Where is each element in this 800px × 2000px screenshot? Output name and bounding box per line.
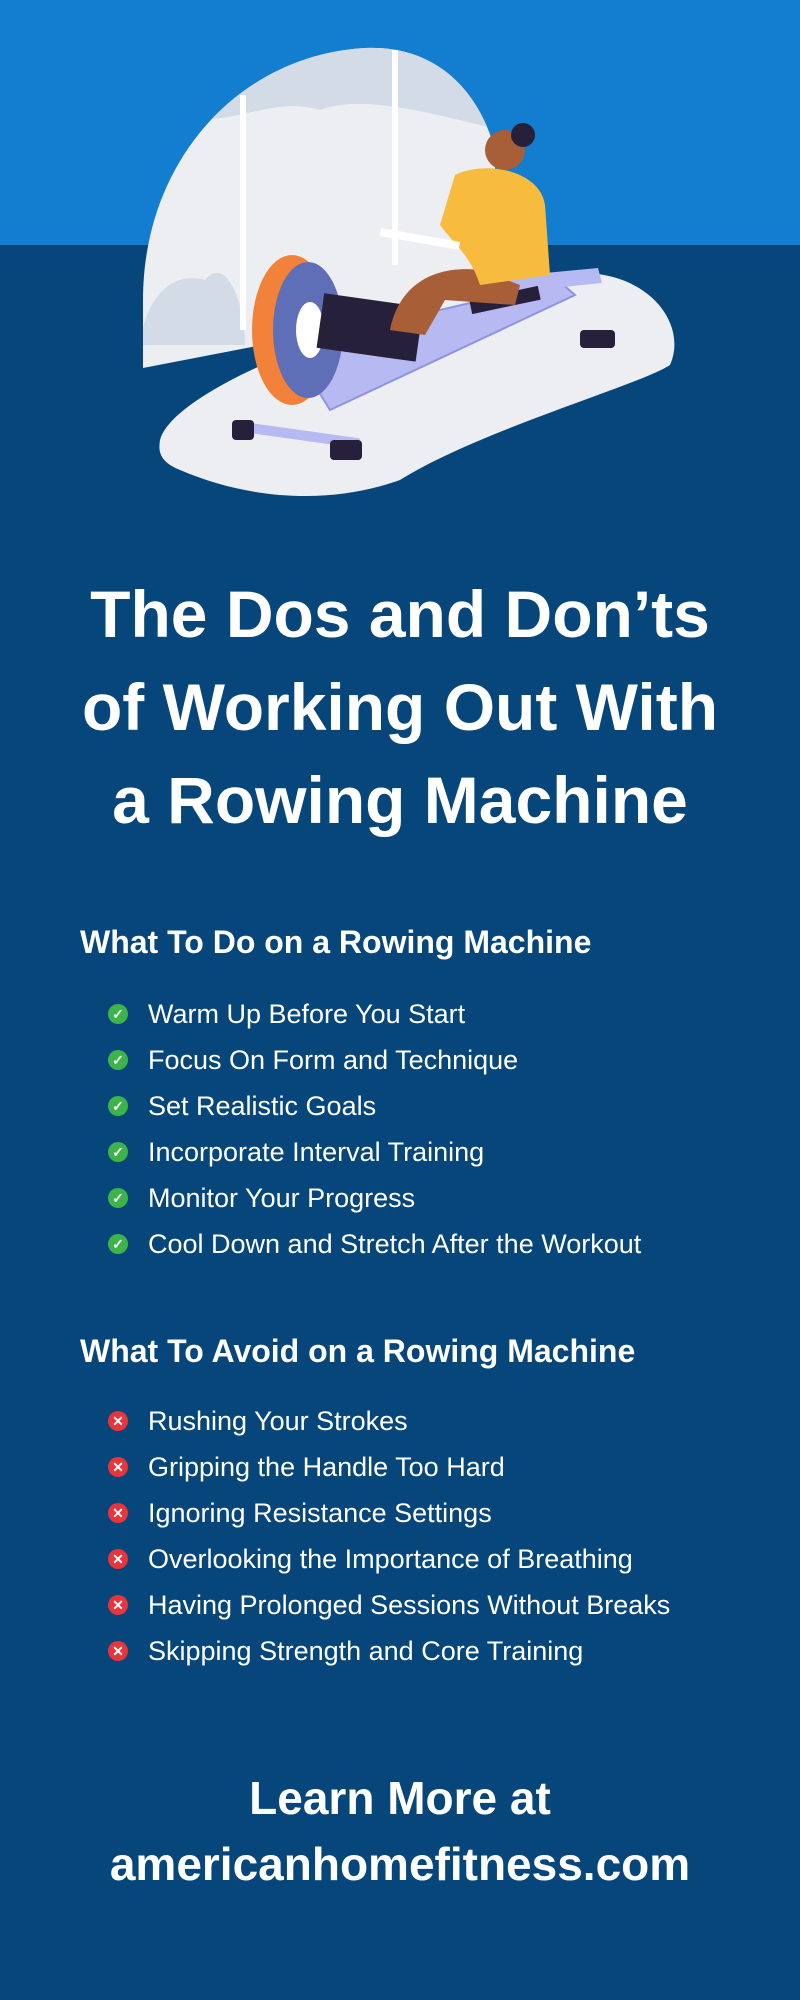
list: dos: ✓	[112, 1098, 124, 1114]
list: dos: Warm Up Before You Start	[148, 999, 465, 1029]
list: dos: Incorporate Interval Training	[148, 1137, 484, 1167]
wall	[140, 40, 500, 368]
list: dos: ✓	[112, 1052, 124, 1068]
title: a Rowing Machine	[112, 763, 688, 837]
list: dos: Monitor Your Progress	[148, 1183, 415, 1213]
list: dos: Set Realistic Goals	[148, 1091, 376, 1121]
list: don'ts: Gripping the Handle Too Hard	[148, 1452, 505, 1482]
list: don'ts: ✕	[112, 1643, 124, 1659]
list: dos: Focus On Form and Technique	[148, 1045, 518, 1075]
call to action: americanhomefitness.com	[110, 1838, 690, 1890]
list: don'ts: ✕	[112, 1551, 124, 1567]
call to action	[110, 1772, 690, 1890]
list: dos: ✓	[112, 1236, 124, 1252]
list: dos: ✓	[112, 1006, 124, 1022]
illustration: rowing machine	[143, 48, 674, 496]
title: of Working Out With	[82, 670, 718, 744]
list: don'ts: Ignoring Resistance Settings	[148, 1498, 492, 1528]
title	[82, 577, 718, 837]
list: don'ts: Skipping Strength and Core Training	[148, 1636, 583, 1666]
list: don'ts: Overlooking the Importance of Breathing	[148, 1544, 633, 1574]
list: don'ts: ✕	[112, 1459, 124, 1475]
list: don'ts: Rushing Your Strokes	[148, 1406, 408, 1436]
list: dos	[108, 999, 642, 1259]
heading: what to avoid: What To Avoid on a Rowing Machine	[80, 1333, 635, 1369]
list: don'ts	[108, 1406, 670, 1666]
list: don'ts: Having Prolonged Sessions Without Breaks	[148, 1590, 670, 1620]
list: dos: ✓	[112, 1144, 124, 1160]
list: don'ts: ✕	[112, 1413, 124, 1429]
list: don'ts: ✕	[112, 1505, 124, 1521]
title: The Dos and Don’ts	[90, 577, 710, 651]
list: don'ts: ✕	[112, 1597, 124, 1613]
floor	[159, 273, 674, 496]
machine	[232, 123, 615, 460]
list: dos: ✓	[112, 1190, 124, 1206]
list: dos: Cool Down and Stretch After the Workout	[148, 1229, 641, 1259]
heading: what to do: What To Do on a Rowing Machine	[80, 924, 591, 960]
call to action: Learn More at	[249, 1772, 551, 1824]
